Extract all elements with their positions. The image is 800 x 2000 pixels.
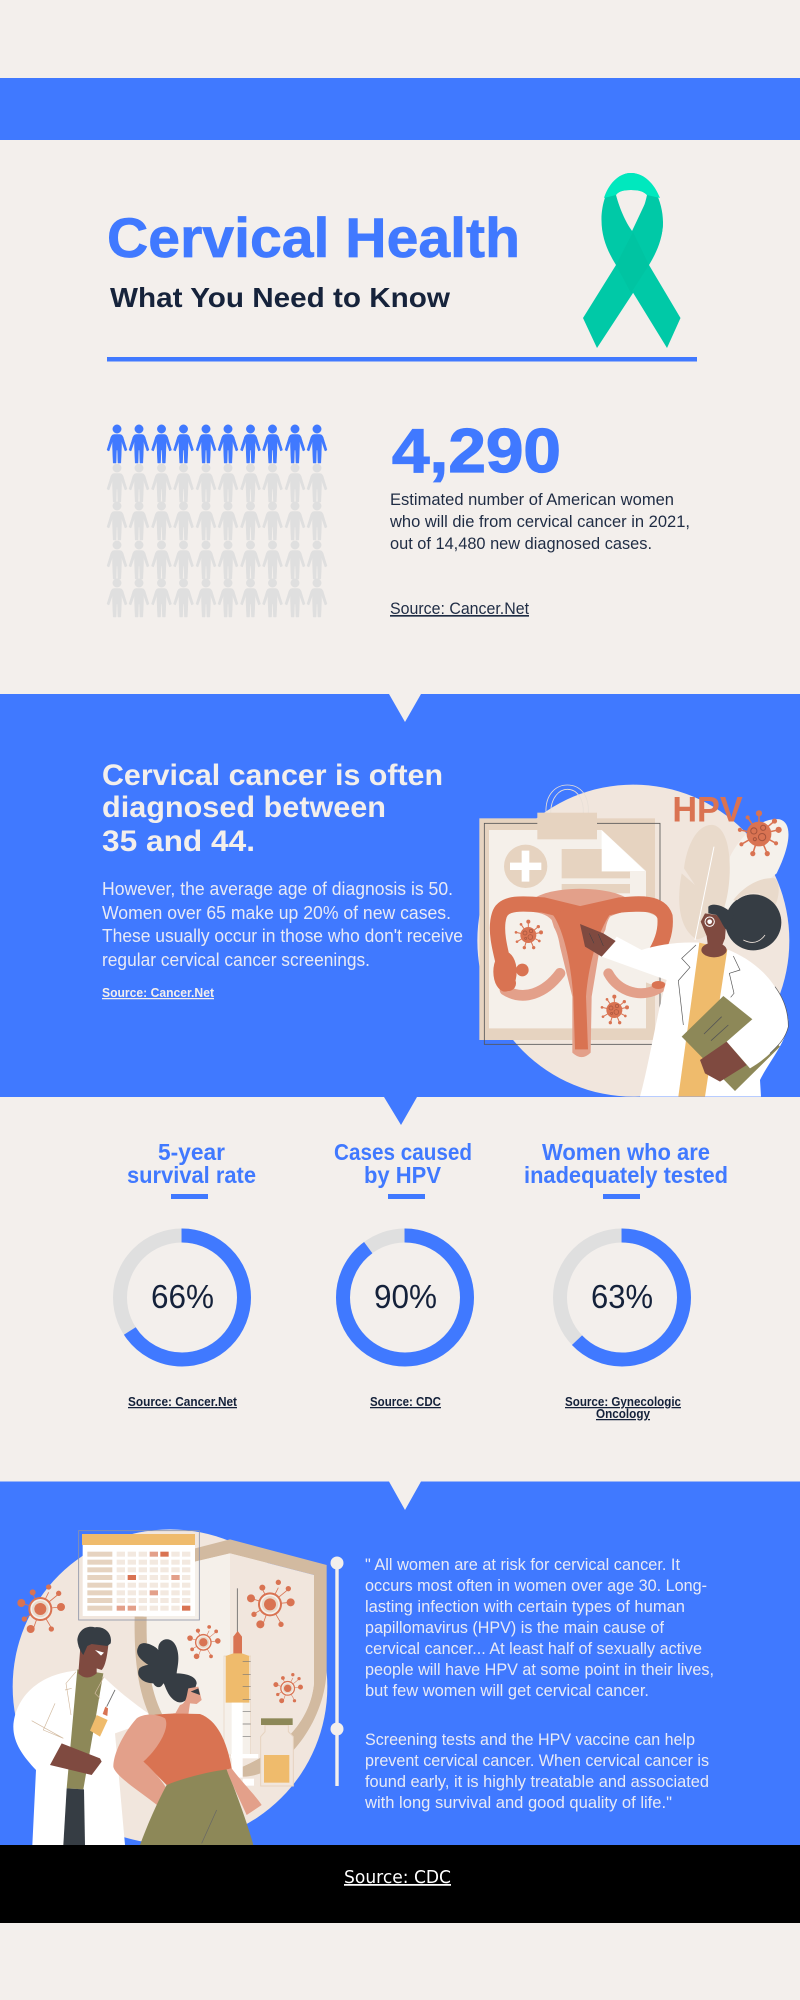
heading: 5-year survival rate: 5-year (158, 1139, 225, 1165)
quote paragraph 1: cervical cancer... At least half of sexually active (365, 1640, 702, 1658)
diagnosis body text: These usually occur in those who don't receive (102, 926, 463, 946)
donut chart: 90%: 90% (374, 1278, 437, 1315)
divider line (107, 357, 697, 362)
diagnosis body text: regular cervical cancer screenings. (102, 950, 370, 970)
heading: 5-year survival rate (127, 1139, 256, 1199)
heading: 5-year survival rate: survival rate (127, 1162, 256, 1188)
panel: diagnosis section background (0, 694, 800, 1125)
heading: diagnosis age: Cervical cancer is often (102, 759, 443, 792)
donut chart: 66%: 66% (151, 1278, 214, 1315)
heading: cases caused by HPV (334, 1139, 472, 1199)
quote paragraph 2: Screening tests and the HPV vaccine can help (365, 1731, 695, 1749)
source: Gynecologic Oncology: Source: Gynecologic (565, 1395, 681, 1409)
statistic description: out of 14,480 new diagnosed cases. (390, 535, 652, 553)
quote paragraph 1: people will have HPV at some point in their lives, (365, 1661, 714, 1679)
quote paragraph 1 (365, 1556, 714, 1700)
statistic description (389, 491, 690, 553)
calendar (79, 1531, 199, 1620)
icon: teal awareness ribbon (583, 173, 680, 348)
heading: inadequately tested (524, 1139, 728, 1199)
panel: risk and prevention section background (0, 1482, 800, 1845)
quote paragraph 2: found early, it is highly treatable and associated (365, 1773, 709, 1791)
quote paragraph 1: " All women are at risk for cervical cancer. It (365, 1556, 680, 1574)
quote paragraph 1: papillomavirus (HPV) is the main cause of (365, 1619, 664, 1637)
heading: diagnosis age (102, 759, 443, 858)
source: Gynecologic Oncology (565, 1395, 681, 1421)
heading: diagnosis age: 35 and 44. (102, 825, 255, 858)
title: Cervical Health (107, 206, 520, 269)
donut chart: 63%: 63% (591, 1278, 653, 1315)
source: CDC: Source: CDC (370, 1395, 441, 1409)
footer black bar (0, 1845, 800, 1923)
source: Gynecologic Oncology: Oncology (596, 1407, 650, 1421)
source link: Source: Cancer.Net (390, 600, 529, 618)
heading: cases caused by HPV: by HPV (364, 1162, 442, 1188)
quote paragraph 2: prevent cervical cancer. When cervical cancer is (365, 1752, 709, 1770)
quote paragraph 1: but few women will get cervical cancer. (365, 1682, 649, 1700)
doctor figure (580, 894, 788, 1097)
subtitle: What You Need to Know (110, 282, 450, 313)
illustration: doctor pointing at uterus diagram with HPV: HPV (672, 791, 743, 830)
heading: inadequately tested: inadequately tested (524, 1162, 728, 1188)
heading: cases caused by HPV: Cases caused (334, 1139, 472, 1165)
male doctor (13, 1627, 148, 1845)
illustration: doctor pointing at uterus diagram with HPV (477, 785, 789, 1097)
syringe (224, 1588, 258, 1786)
uterus diagram (493, 889, 665, 1057)
quote paragraph 2: with long survival and good quality of life." (364, 1794, 672, 1812)
donut chart: 63% (560, 1236, 684, 1360)
big number: 4,290 (392, 417, 561, 486)
vial (261, 1718, 293, 1786)
source: Cancer.Net: Source: Cancer.Net (128, 1395, 238, 1409)
diagnosis body text: However, the average age of diagnosis is 50. (102, 879, 453, 899)
illustration: doctor, patient, shield, syringe and calendar (13, 1529, 327, 1845)
donut chart: 66% (120, 1236, 244, 1360)
female patient (113, 1639, 262, 1845)
quote paragraph 2 (364, 1731, 709, 1812)
quote paragraph 1: lasting infection with certain types of human (365, 1598, 685, 1616)
statistic description: Estimated number of American women (390, 491, 674, 509)
top blue band (0, 78, 800, 140)
quote paragraph 1: occurs most often in women over age 30. Long- (365, 1577, 707, 1595)
footer source: Source: CDC (344, 1868, 451, 1888)
source link: Source: Cancer.Net (102, 986, 215, 1000)
statistic description: who will die from cervical cancer in 2021, (389, 513, 690, 531)
donut chart: 90% (343, 1236, 467, 1360)
timeline slider decoration (330, 1556, 344, 1786)
diagnosis body text: Women over 65 make up 20% of new cases. (102, 903, 451, 923)
heading: inadequately tested: Women who are (542, 1139, 710, 1165)
heading: diagnosis age: diagnosed between (102, 791, 386, 824)
diagnosis body text (102, 879, 463, 970)
pictogram: 10 of 50 women highlighted (107, 425, 327, 617)
